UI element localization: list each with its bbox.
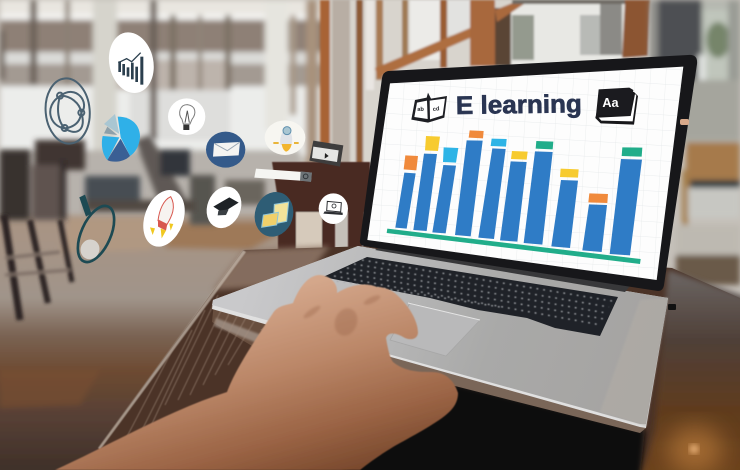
webcam light on bezel bbox=[680, 119, 689, 125]
posts bbox=[93, 0, 117, 150]
bar chart bbox=[387, 130, 642, 264]
icon: light bulb bbox=[168, 98, 205, 135]
book icon: cd bbox=[433, 106, 440, 113]
icon: search bar bbox=[254, 169, 312, 182]
hand on trackpad bbox=[55, 275, 458, 470]
laptop bbox=[212, 55, 697, 433]
right window and chair bbox=[650, 0, 740, 285]
icon: rocket badge bbox=[265, 120, 305, 155]
icon: rocket launch bbox=[136, 184, 192, 253]
wooden table bbox=[98, 246, 740, 470]
book icon: ab bbox=[417, 107, 425, 113]
floating icons bbox=[43, 28, 348, 267]
dark shadow under laptop bbox=[340, 370, 645, 470]
alphabet book icon: Aa bbox=[602, 96, 619, 110]
icon: documents bbox=[249, 187, 299, 242]
title: E learning bbox=[456, 90, 582, 120]
trackpad bbox=[390, 303, 480, 356]
left window bands bbox=[0, 0, 330, 16]
icon: laptop search bbox=[319, 193, 348, 224]
icon: growth chart bbox=[103, 28, 159, 97]
light reflection bbox=[667, 426, 723, 470]
icon: graduation cap bbox=[201, 181, 247, 233]
right side of table bbox=[640, 270, 740, 470]
chair legs bbox=[4, 215, 72, 320]
icon: magnifying glass bbox=[70, 195, 122, 267]
screen content bbox=[367, 67, 683, 280]
wood grain bbox=[122, 295, 255, 446]
rubber foot bbox=[668, 304, 676, 310]
icon: network globe bbox=[43, 77, 92, 145]
icon: video player bbox=[309, 141, 343, 167]
laptop base bbox=[212, 246, 668, 431]
blurred chairs bbox=[0, 135, 265, 225]
wooden window frames bbox=[320, 0, 650, 170]
icon: mail bbox=[206, 132, 245, 168]
hinge bbox=[375, 247, 630, 292]
wooden chair near laptop bbox=[272, 162, 370, 250]
floor bbox=[0, 215, 300, 470]
knuckle shadows bbox=[302, 293, 381, 339]
screen bezel bbox=[360, 55, 697, 291]
keyboard bbox=[323, 257, 618, 336]
icon: pie chart bbox=[102, 114, 140, 162]
book icon bbox=[411, 93, 447, 123]
alphabet book icon bbox=[595, 88, 638, 125]
